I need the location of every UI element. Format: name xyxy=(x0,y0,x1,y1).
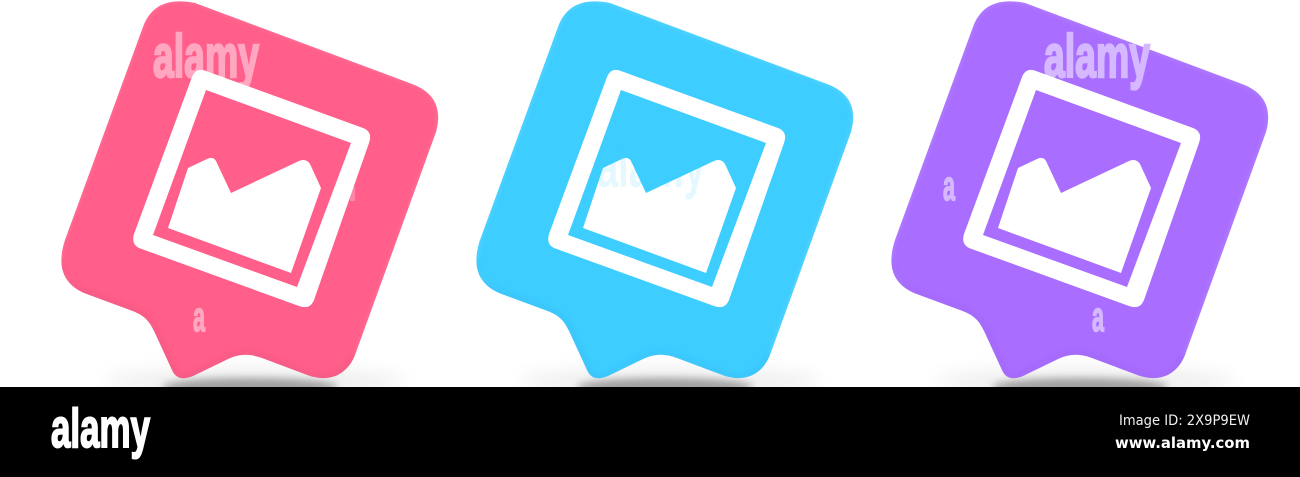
mountain: blue xyxy=(583,158,736,273)
pin body: blue xyxy=(476,1,853,378)
image id: Image ID: 2X9P9EW xyxy=(1119,413,1250,429)
pin body: purple xyxy=(891,1,1268,378)
watermark: alamy faint: alamy xyxy=(597,133,705,200)
watermark: alamy: alamy xyxy=(1044,23,1150,90)
shadow: purple pin xyxy=(935,369,1235,396)
watermark: alamy: alamy xyxy=(153,23,259,90)
soft edge shading: pink xyxy=(60,1,438,378)
shadow: blue pin xyxy=(520,369,820,396)
watermark fragment: right of frame xyxy=(350,187,355,201)
footer logo: alamy xyxy=(51,397,150,459)
pin: blue image button xyxy=(475,1,853,396)
pin body: pink xyxy=(61,1,438,378)
pin: pink image button xyxy=(60,1,438,396)
footer bar xyxy=(0,387,1300,477)
image frame: pink xyxy=(133,70,370,307)
website: www.alamy.com xyxy=(1115,434,1250,452)
image frame: blue xyxy=(548,70,785,307)
pin: purple image button xyxy=(890,1,1268,396)
image frame: purple xyxy=(963,70,1200,307)
soft edge shading: purple xyxy=(890,1,1268,378)
mountain: purple xyxy=(998,158,1151,273)
shadow: pink pin xyxy=(105,369,405,396)
watermark: a: a xyxy=(193,293,205,340)
soft edge shading: blue xyxy=(475,1,853,378)
watermark: a bottom: a xyxy=(1092,293,1104,340)
watermark: a left: a xyxy=(943,162,955,209)
mountain: pink xyxy=(168,158,321,273)
